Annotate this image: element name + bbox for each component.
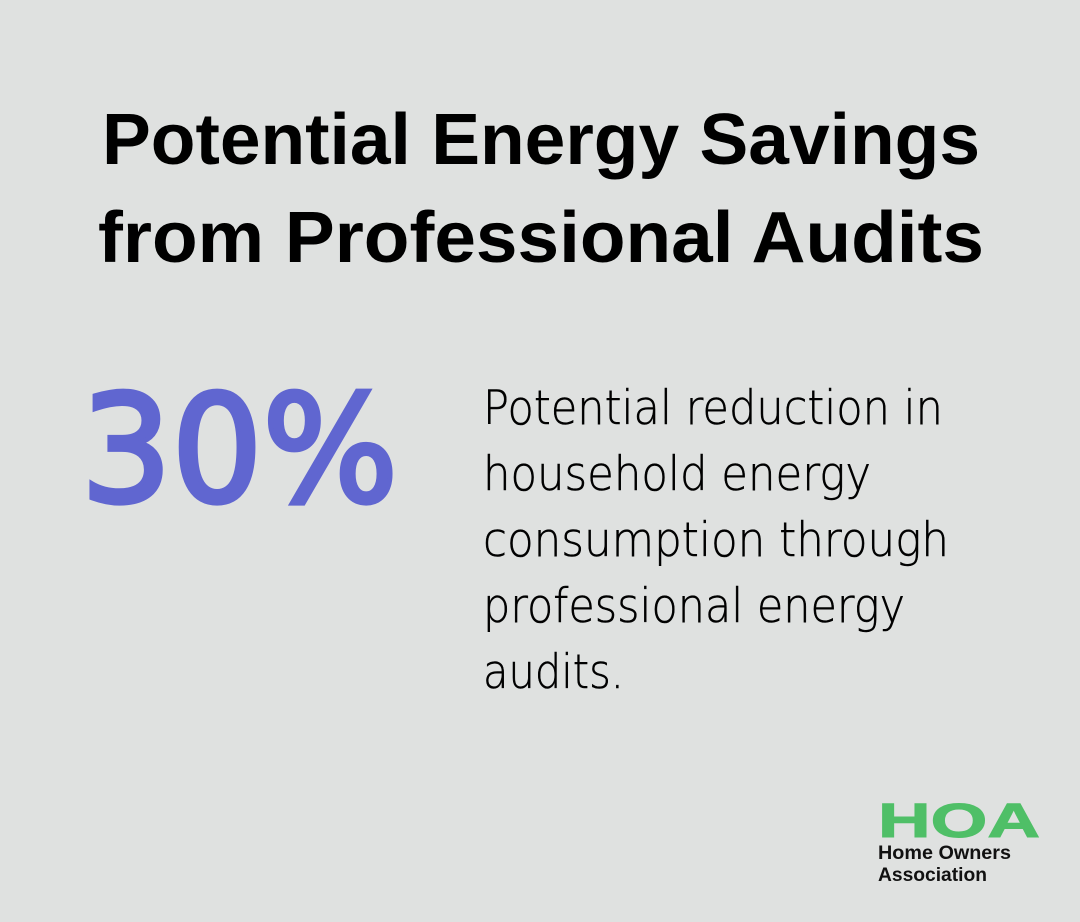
- description text: [483, 381, 949, 700]
- big statistic: 30%: 30%: [81, 364, 398, 536]
- logo: HOA Home Owners Association: [878, 795, 1040, 886]
- description text: professional energy: [483, 579, 905, 634]
- logo tagline: [878, 843, 1011, 886]
- logo wordmark: HOA: [878, 795, 1040, 848]
- title: from Professional Audits: [98, 198, 984, 278]
- logo tagline: Association: [878, 865, 987, 886]
- logo tagline: Home Owners: [878, 843, 1011, 864]
- title: Potential Energy Savings: [102, 100, 980, 180]
- description text: consumption through: [483, 513, 949, 568]
- title: [98, 100, 984, 278]
- description text: household energy: [483, 447, 871, 502]
- description text: audits.: [483, 645, 624, 700]
- description text: Potential reduction in: [483, 381, 943, 436]
